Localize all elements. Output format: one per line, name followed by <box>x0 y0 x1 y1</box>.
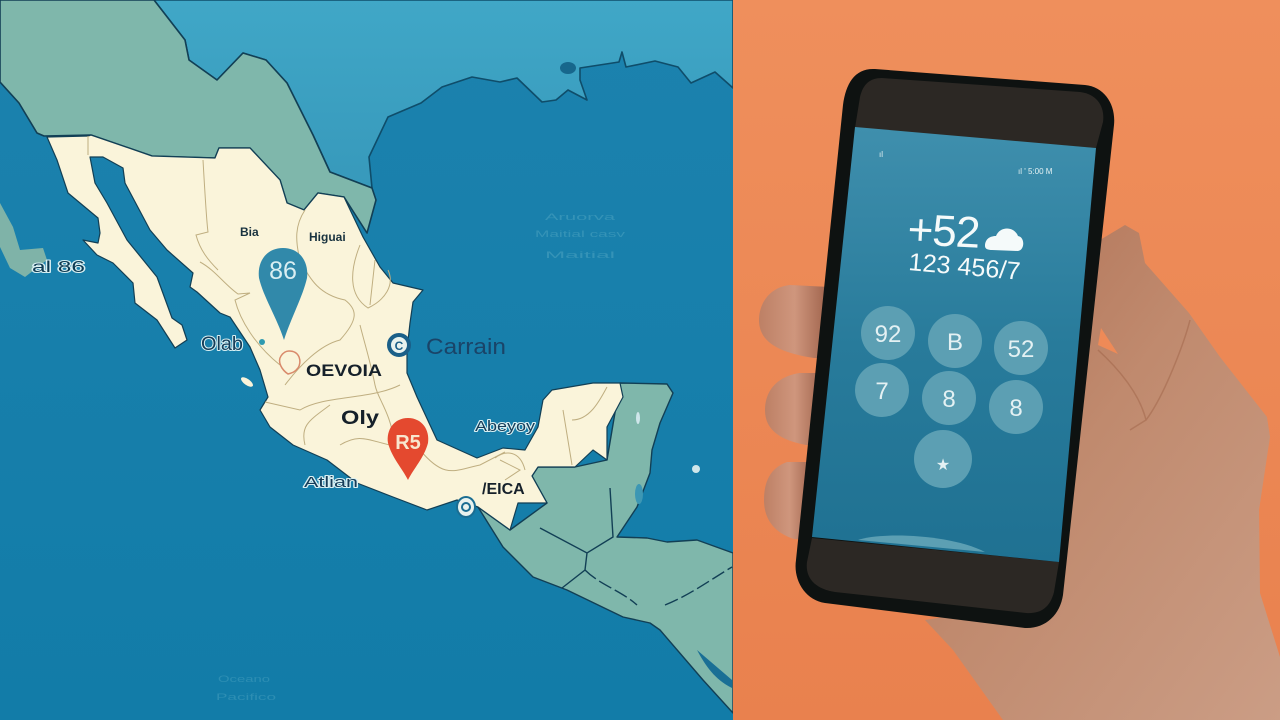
key 1 <box>861 306 915 360</box>
key 2 <box>928 314 982 368</box>
key 5: 8 <box>942 386 956 413</box>
faint gulf text: Aruorva <box>545 212 615 222</box>
label: Carrain: Carrain <box>426 334 506 359</box>
status right: ıl ' 5:00 M <box>1018 167 1053 176</box>
faint ocean text: Pacifico <box>216 692 276 702</box>
faint ocean text <box>216 674 276 702</box>
hand: fingers <box>759 285 830 540</box>
icon: small outlined pin <box>280 351 300 374</box>
northern land in light blue <box>154 0 733 188</box>
icon: blue map pin <box>259 248 307 340</box>
status bar <box>879 150 1053 176</box>
finger 3 <box>764 462 815 540</box>
panel: orange background with phone <box>733 0 1280 720</box>
label: Higuai: Higuai <box>309 230 346 244</box>
bottom bar on screen <box>858 536 985 552</box>
number: 123 456/7 <box>907 248 1021 286</box>
lake <box>697 650 732 688</box>
island <box>240 376 254 388</box>
icon: red map pin: R5 <box>395 432 421 454</box>
key 4: 7 <box>875 378 889 405</box>
land: Mexico <box>47 135 623 530</box>
keypad <box>855 306 1048 488</box>
country code: +52 <box>906 205 981 258</box>
hand: palm behind phone <box>925 225 1280 720</box>
icon: red map pin <box>388 418 428 480</box>
orange background <box>733 0 1280 720</box>
label: west coast: al 86 <box>32 259 85 276</box>
islands <box>635 412 700 504</box>
finger 2 <box>765 373 825 445</box>
faint gulf text: Maitial casv <box>535 229 626 239</box>
label: Bia: Bia <box>240 225 259 239</box>
key 6: 8 <box>1009 395 1023 422</box>
gap between thumb and palm <box>1098 328 1118 354</box>
faint gulf text: Maitial <box>545 250 615 260</box>
label: Atlian: Atlian <box>304 474 358 491</box>
finger 1 <box>759 285 830 358</box>
label: Olab: Olab <box>201 334 243 355</box>
icon: C marker <box>389 335 409 355</box>
phone screen <box>812 127 1096 562</box>
label: Eica: /EICA <box>482 481 525 498</box>
faint gulf text <box>535 212 626 260</box>
hand: thumb crease <box>1098 320 1190 430</box>
label: Abeyoy: Abeyoy <box>475 418 536 435</box>
phone top bezel <box>855 78 1103 148</box>
label: Olab <box>201 334 265 355</box>
status left: ıl <box>879 150 883 159</box>
key 4 <box>855 363 909 417</box>
key star: ★ <box>936 457 950 474</box>
faint ocean text: Oceano <box>218 674 270 684</box>
label: Oevola: OEVOIA <box>306 361 382 380</box>
state borders <box>88 136 607 480</box>
key 6 <box>989 380 1043 434</box>
icon: coastal marker <box>457 497 475 517</box>
key 1: 92 <box>875 321 901 348</box>
phone bottom bezel <box>807 538 1059 613</box>
key 2: B <box>947 329 963 356</box>
ocean background <box>0 0 733 720</box>
key 5 <box>922 371 976 425</box>
key 3 <box>994 321 1048 375</box>
label: Oly: Oly <box>341 408 380 429</box>
land: Central America and Yucatan <box>478 383 733 713</box>
land: United States <box>0 0 376 233</box>
phone body <box>796 69 1114 628</box>
land: western island <box>0 203 47 277</box>
key 3: 52 <box>1008 336 1034 363</box>
phone number <box>906 205 1021 286</box>
key star <box>914 430 972 488</box>
icon: blue map pin: 86 <box>269 257 297 285</box>
icon: cloud <box>985 228 1023 251</box>
Central America borders <box>540 488 732 605</box>
inlet on the north coast <box>560 62 576 74</box>
icon: C marker: C <box>395 339 404 353</box>
panel: map of Mexico <box>0 0 733 720</box>
